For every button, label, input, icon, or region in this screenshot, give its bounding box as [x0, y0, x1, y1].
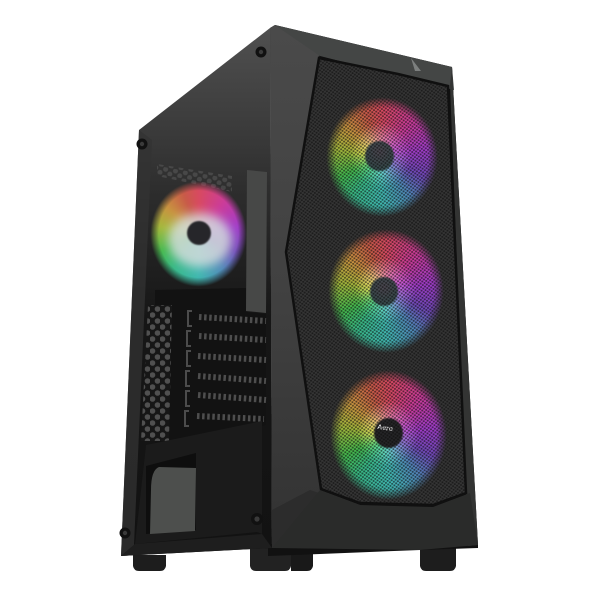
PC case illustration	[120, 25, 478, 571]
pillar lower facet	[272, 490, 365, 548]
front backing	[270, 25, 478, 550]
front fan top	[327, 98, 437, 216]
rear interior	[155, 288, 266, 445]
honeycomb vent	[141, 305, 172, 441]
screw: top right	[256, 46, 266, 58]
front fan bottom	[331, 371, 446, 499]
bottom rail	[268, 544, 478, 556]
PSU window	[146, 453, 196, 534]
foot: front left	[250, 546, 313, 571]
top fan ring	[326, 97, 438, 217]
rear fan white glow	[168, 213, 232, 267]
screw: top left	[136, 138, 148, 150]
bottom bezel	[272, 490, 478, 550]
corner pillar	[270, 25, 360, 548]
foot: rear left	[133, 555, 166, 571]
top accent triangle	[411, 58, 421, 71]
motherboard connector rows	[197, 317, 266, 419]
rear RGB fan	[151, 182, 246, 286]
side glass panel	[121, 28, 272, 556]
top fan glow	[352, 124, 408, 184]
middle fan glow	[356, 260, 412, 320]
top fan hub	[365, 141, 394, 171]
bottom fan glow	[360, 404, 416, 464]
top bezel	[275, 25, 454, 90]
hub logo: Aero	[377, 424, 393, 433]
mesh front panel	[286, 58, 466, 505]
PSU shroud	[135, 421, 262, 544]
PCI bracket bar	[246, 170, 267, 313]
middle fan hub	[370, 277, 398, 306]
glass frame left strip	[121, 130, 152, 556]
right frame	[450, 67, 478, 546]
middle fan ring	[328, 229, 444, 353]
upper vent holes	[157, 164, 232, 192]
rear fan hub	[187, 221, 211, 245]
bottom fan ring	[330, 370, 447, 500]
front fan middle	[329, 230, 443, 352]
screw: bottom right	[251, 513, 263, 525]
bottom fan hub	[374, 418, 403, 448]
rear fan ring	[150, 181, 247, 287]
cable tabs	[185, 311, 192, 426]
screw: bottom left	[120, 528, 130, 538]
mesh texture	[286, 58, 466, 505]
PSU block	[150, 467, 196, 534]
foot: front right	[420, 548, 456, 571]
bottom glass edge	[121, 534, 272, 556]
